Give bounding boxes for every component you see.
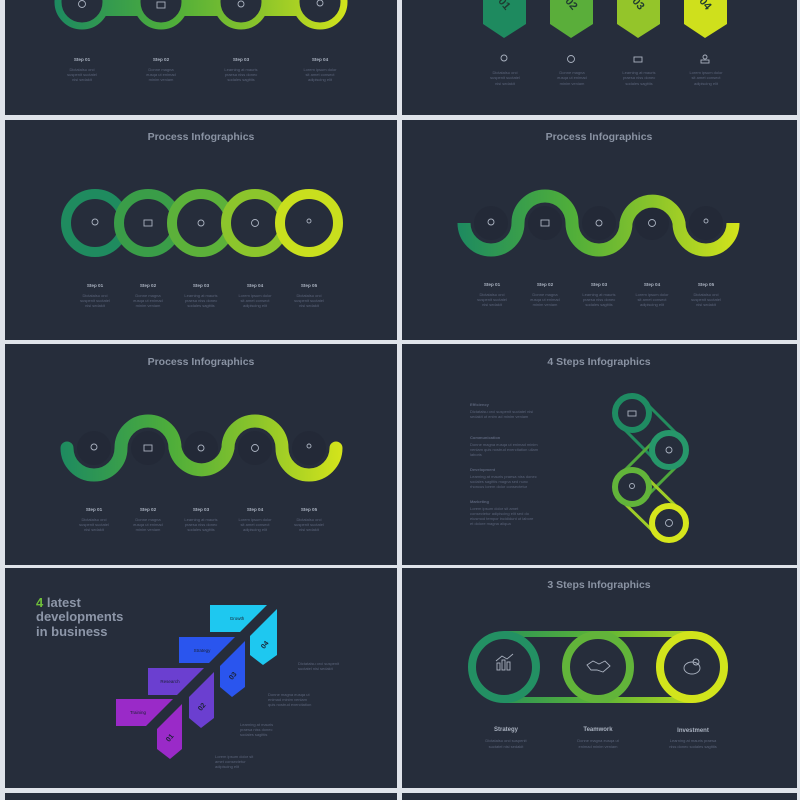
heading: Process Infographics [148,131,255,143]
step labels: Dictatalsu orci [69,67,95,72]
step labels: Step 02 [140,283,157,288]
step labels: praesa niss donec [583,297,615,302]
heading: 4 latest [36,595,81,610]
panel: 4 latest developments: developments [36,609,123,624]
descriptions: Dictatalsu orci suspenit [298,661,340,666]
step labels: nisi sedakit [84,527,105,532]
step labels: Donne magna [135,293,161,298]
step labels: Step 04 [247,283,264,288]
step labels: Dictatalsu orci [693,292,719,297]
descriptions: enimad minim veniam [268,697,308,702]
step labels: sit amet consect [241,298,270,303]
labels: Learning at mauris praesa [670,738,717,743]
descriptions: suctatel nisi sedakit [298,666,334,671]
labels: Dictatalsu orci suspenit [485,738,527,743]
step labels: Step 02 [140,507,157,512]
step labels: suspenit suctatel [80,298,110,303]
ribbon diagram: 04 [260,640,271,651]
panel: 4 steps infographics [402,344,797,565]
step labels: Step 05 [301,283,318,288]
labels: suctatel nisi sedakit [489,744,524,749]
descriptions [215,661,340,769]
step labels: praesa niss donec [185,522,217,527]
step labels: suspenit suctatel [79,522,109,527]
step labels: eusqa ut enimad [133,298,163,303]
text list: sedakit ut enim ad minim veniam [470,414,529,419]
step labels: Step 04 [312,57,329,62]
step labels: minim veniam [136,527,161,532]
icon: piggy bank [684,659,700,674]
step labels: Donne magna [148,67,174,72]
descriptions: adipiscing elit [215,764,240,769]
text list: Efficiency [470,402,490,407]
step labels: nisi sedakit [72,77,93,82]
step labels: Step 03 [193,507,210,512]
step labels: Step 03 [591,282,608,287]
step labels: Step 05 [301,507,318,512]
step labels: praesa niss donec [185,298,217,303]
step labels: Step 02 [537,282,554,287]
icons and descriptions: Dictatalsu orci [492,70,518,75]
step labels: Lorem ipsum dolor [238,293,272,298]
text list: sodales sagittis magna sed nunc [470,479,528,484]
step labels [80,283,324,308]
step labels: praesa niss donec [225,72,257,77]
chain of rings [615,396,686,540]
ribbon diagram: 02 [197,702,208,713]
step labels: adipiscing elit [243,303,268,308]
ribbon diagram: 01 [165,733,176,744]
step labels: suspenit suctatel [67,72,97,77]
step labels: Donne magna [135,517,161,522]
panel: 4 latest developments [5,568,397,788]
descriptions: Learning at mauris [240,722,273,727]
step labels: Dictatalsu orci [296,517,322,522]
step labels: eusqa ut enimad [133,522,163,527]
labels: Teamwork [583,727,613,733]
step labels: nisi sedakit [299,527,320,532]
text list: eiusmod tempor incididunt ut labore [470,516,534,521]
rings with rails [472,631,724,703]
heading: 4 Steps Infographics [547,356,651,368]
ribbon diagram: 03 [228,671,239,682]
icons and descriptions: Learning at mauris [622,70,656,75]
panel: process wave (flat ends) [402,120,797,340]
icons and descriptions: Lorem ipsum dolor [689,70,723,75]
step labels: Learning at mauris [184,517,218,522]
descriptions: Donne magna eusqa ut [268,692,310,697]
icons and descriptions: sodales sagittis [625,81,653,86]
descriptions: quis nostrud exercitation [268,702,311,707]
text list: consectetur adipiscing elit sed do [470,511,530,516]
descriptions: amet consectetur [215,759,246,764]
descriptions: sodales sagittis [240,732,267,737]
step labels: sodales sagittis [227,77,255,82]
step labels: Step 01 [74,57,91,62]
labels: enimad minim veniam [579,744,618,749]
step labels: Learning at mauris [582,292,616,297]
text list: Lorem ipsum dolor sit amet [470,506,519,511]
ribbon diagram: Research [160,679,180,684]
ribbon diagram [116,605,277,759]
step labels: Donne magna [532,292,558,297]
heading: 3 Steps Infographics [547,579,651,591]
icons and descriptions: minim veniam [560,81,585,86]
text list: Communication [470,435,501,440]
ribbon diagram: Strategy [194,648,211,653]
labels: Investment [677,728,709,734]
panel: 3 steps infographics [402,568,797,788]
text list: Donne magna eusqa ut enimad minim [470,442,538,447]
step labels: minim veniam [149,77,174,82]
ribbon diagram: Training [130,710,147,715]
bottom partial panels [5,793,797,800]
step labels: Step 04 [247,507,264,512]
step labels: Step 03 [193,283,210,288]
icons and descriptions: adipiscing elit [694,81,719,86]
text list [470,402,539,526]
step labels: eusqa ut enimad [146,72,176,77]
step labels: suspenit suctatel [691,297,721,302]
step labels: minim veniam [533,302,558,307]
step labels: adipiscing elit [308,77,333,82]
connected rings chain [58,0,344,26]
text list: Development [470,467,496,472]
heading: Process Infographics [148,356,255,368]
icons and descriptions: suspenit suctatel [490,75,520,80]
panel: top-left step rings [5,0,397,115]
step labels [67,57,337,82]
step labels: adipiscing elit [243,527,268,532]
step labels: nisi sedakit [482,302,503,307]
wave [464,196,733,250]
step labels: sodales sagittis [585,302,613,307]
step labels [477,282,721,307]
icon: chart [496,654,513,670]
step labels: minim veniam [136,303,161,308]
panel: top-right arrow markers [402,0,797,115]
icons and descriptions: nisi sedakit [495,81,516,86]
step labels: Step 01 [87,283,104,288]
step labels: Dictatalsu orci [479,292,505,297]
step labels: nisi sedakit [696,302,717,307]
step labels: Step 01 [484,282,501,287]
step labels: Learning at mauris [184,293,218,298]
step labels: sodales sagittis [187,527,215,532]
panel: process rings [5,120,397,340]
icons and descriptions [490,55,723,86]
text list: et dolore magna aliqua [470,521,511,526]
step labels: Step 04 [644,282,661,287]
labels: niss donec sodales sagittis [669,744,717,749]
labels: Donne magna eusqa ut [577,738,620,743]
step labels: sit amet consect [638,297,667,302]
icons and descriptions: Donne magna [559,70,585,75]
step labels: Lorem ipsum dolor [635,292,669,297]
step labels: Lorem ipsum dolor [238,517,272,522]
arrow markers 01-04 [483,0,727,38]
text list: rhoncus lorem dolor consectetur [470,484,528,489]
ribbon diagram: Growth [230,616,245,621]
step labels: suspenit suctatel [477,297,507,302]
step labels: Step 05 [698,282,715,287]
step labels: eusqa ut enimad [530,297,560,302]
descriptions: Lorem ipsum dolor sit [215,754,254,759]
heading: Process Infographics [546,131,653,143]
icon: handshake [587,661,610,672]
text list: veniam quis nostrud exercitation ullam [470,447,539,452]
step labels: nisi sedakit [299,303,320,308]
step labels: Dictatalsu orci [82,293,108,298]
step labels: Step 01 [86,507,103,512]
descriptions: praesa niss donec [240,727,272,732]
icons and descriptions: sit amet consect [692,75,721,80]
text list: Dictatalsu orci suspenit suctatel nisi [470,409,533,414]
step labels: adipiscing elit [640,302,665,307]
step labels: sodales sagittis [187,303,215,308]
step labels: Dictatalsu orci [296,293,322,298]
step labels: Dictatalsu orci [81,517,107,522]
icons and descriptions: praesa niss donec [623,75,655,80]
panel: 4 latest developments: in business [36,624,108,639]
labels: Strategy [494,727,519,733]
panel: process wave (round ends) [5,344,397,565]
step labels: Step 02 [153,57,170,62]
step labels: sit amet consect [241,522,270,527]
text list: Learning at mauris praesa niss donec [470,474,537,479]
labels [485,727,717,749]
text list: laboris [470,452,482,457]
wave [67,421,336,475]
five overlapping rings [66,194,338,252]
step labels: suspenit suctatel [294,298,324,303]
step labels: sit amet consect [306,72,335,77]
step labels: Step 03 [233,57,250,62]
step labels [79,507,324,532]
icons and descriptions: eusqa ut enimad [557,75,587,80]
step labels: Learning at mauris [224,67,258,72]
step labels: Lorem ipsum dolor [303,67,337,72]
step labels: nisi sedakit [85,303,106,308]
step labels: suspenit suctatel [294,522,324,527]
text list: Marketing [470,499,489,504]
